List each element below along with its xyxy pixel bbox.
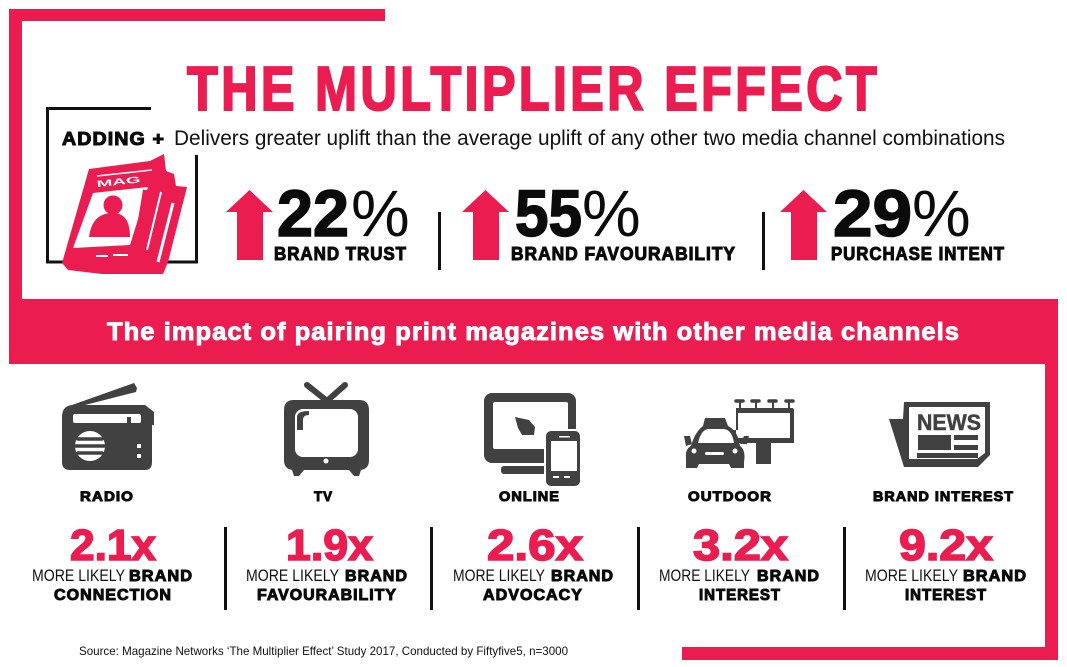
stat: brand trust: BRAND TRUST xyxy=(274,244,407,264)
column: brand interest: INTEREST xyxy=(905,587,987,604)
column: online xyxy=(453,393,614,604)
stat: brand trust xyxy=(226,176,410,264)
stat: brand favourability xyxy=(462,176,736,264)
column: outdoor: BRAND xyxy=(757,568,820,585)
column: brand interest xyxy=(865,402,1027,604)
icon: online devices xyxy=(484,393,582,488)
column: brand interest: BRAND xyxy=(963,568,1027,585)
column: tv xyxy=(246,385,408,604)
stat: purchase intent xyxy=(780,176,1005,264)
title: THE MULTIPLIER EFFECT xyxy=(187,55,880,124)
column: radio xyxy=(32,383,193,604)
icon: newspaper: NEWS xyxy=(917,410,981,435)
column: radio: 2.1x xyxy=(70,521,157,570)
column: brand interest: 9.2x xyxy=(899,521,994,570)
column: radio: RADIO xyxy=(80,488,134,504)
icon: tv xyxy=(284,385,369,476)
black frame around magazine xyxy=(48,108,196,262)
stat: purchase intent: % xyxy=(912,176,971,250)
stat: purchase intent: PURCHASE INTENT xyxy=(831,244,1005,264)
column: outdoor: OUTDOOR xyxy=(688,488,772,504)
stat: brand trust: % xyxy=(351,176,410,250)
banner xyxy=(9,299,1058,364)
stat: brand favourability: 55 xyxy=(515,176,582,250)
magazine masthead: MAG xyxy=(96,174,141,189)
column: outdoor xyxy=(659,400,820,604)
column: radio: CONNECTION xyxy=(54,587,172,604)
column: tv: 1.9x xyxy=(286,521,374,570)
column: online: ADVOCACY xyxy=(483,587,583,604)
column: outdoor: INTEREST xyxy=(699,587,781,604)
column: outdoor: MORE LIKELY xyxy=(659,566,750,585)
column: outdoor: 3.2x xyxy=(693,521,789,570)
icon: magazine xyxy=(62,154,187,274)
stat: brand favourability: % xyxy=(582,176,641,250)
column: online: 2.6x xyxy=(487,521,584,570)
column: radio: BRAND xyxy=(129,568,193,585)
column: radio: MORE LIKELY xyxy=(32,566,125,585)
column: online: MORE LIKELY xyxy=(453,566,545,585)
stat: brand favourability: BRAND FAVOURABILITY xyxy=(511,244,736,264)
banner: The impact of pairing print magazines with other media channels xyxy=(107,318,960,346)
column: brand interest: BRAND INTEREST xyxy=(873,488,1014,504)
column: brand interest: MORE LIKELY xyxy=(865,566,958,585)
stat: brand trust: 22 xyxy=(277,176,349,250)
column: online: ONLINE xyxy=(499,488,560,504)
source note: Source: Magazine Networks ‘The Multiplier Effect’ Study 2017, Conducted by Fiftyfive5, n=3000 xyxy=(79,644,568,658)
column: tv: TV xyxy=(314,488,333,504)
stat: purchase intent: 29 xyxy=(833,176,912,250)
column: tv: MORE LIKELY xyxy=(246,566,339,585)
column: tv: BRAND xyxy=(345,568,408,585)
icon: taxi and billboard xyxy=(684,400,794,468)
icon: newspaper xyxy=(889,402,990,467)
column: online: BRAND xyxy=(551,568,614,585)
adding label: ADDING + xyxy=(62,129,165,149)
icon: radio xyxy=(62,383,154,470)
subheading: Delivers greater uplift than the average uplift of any other two media channel combinations xyxy=(174,127,1005,150)
column: tv: FAVOURABILITY xyxy=(257,587,397,604)
